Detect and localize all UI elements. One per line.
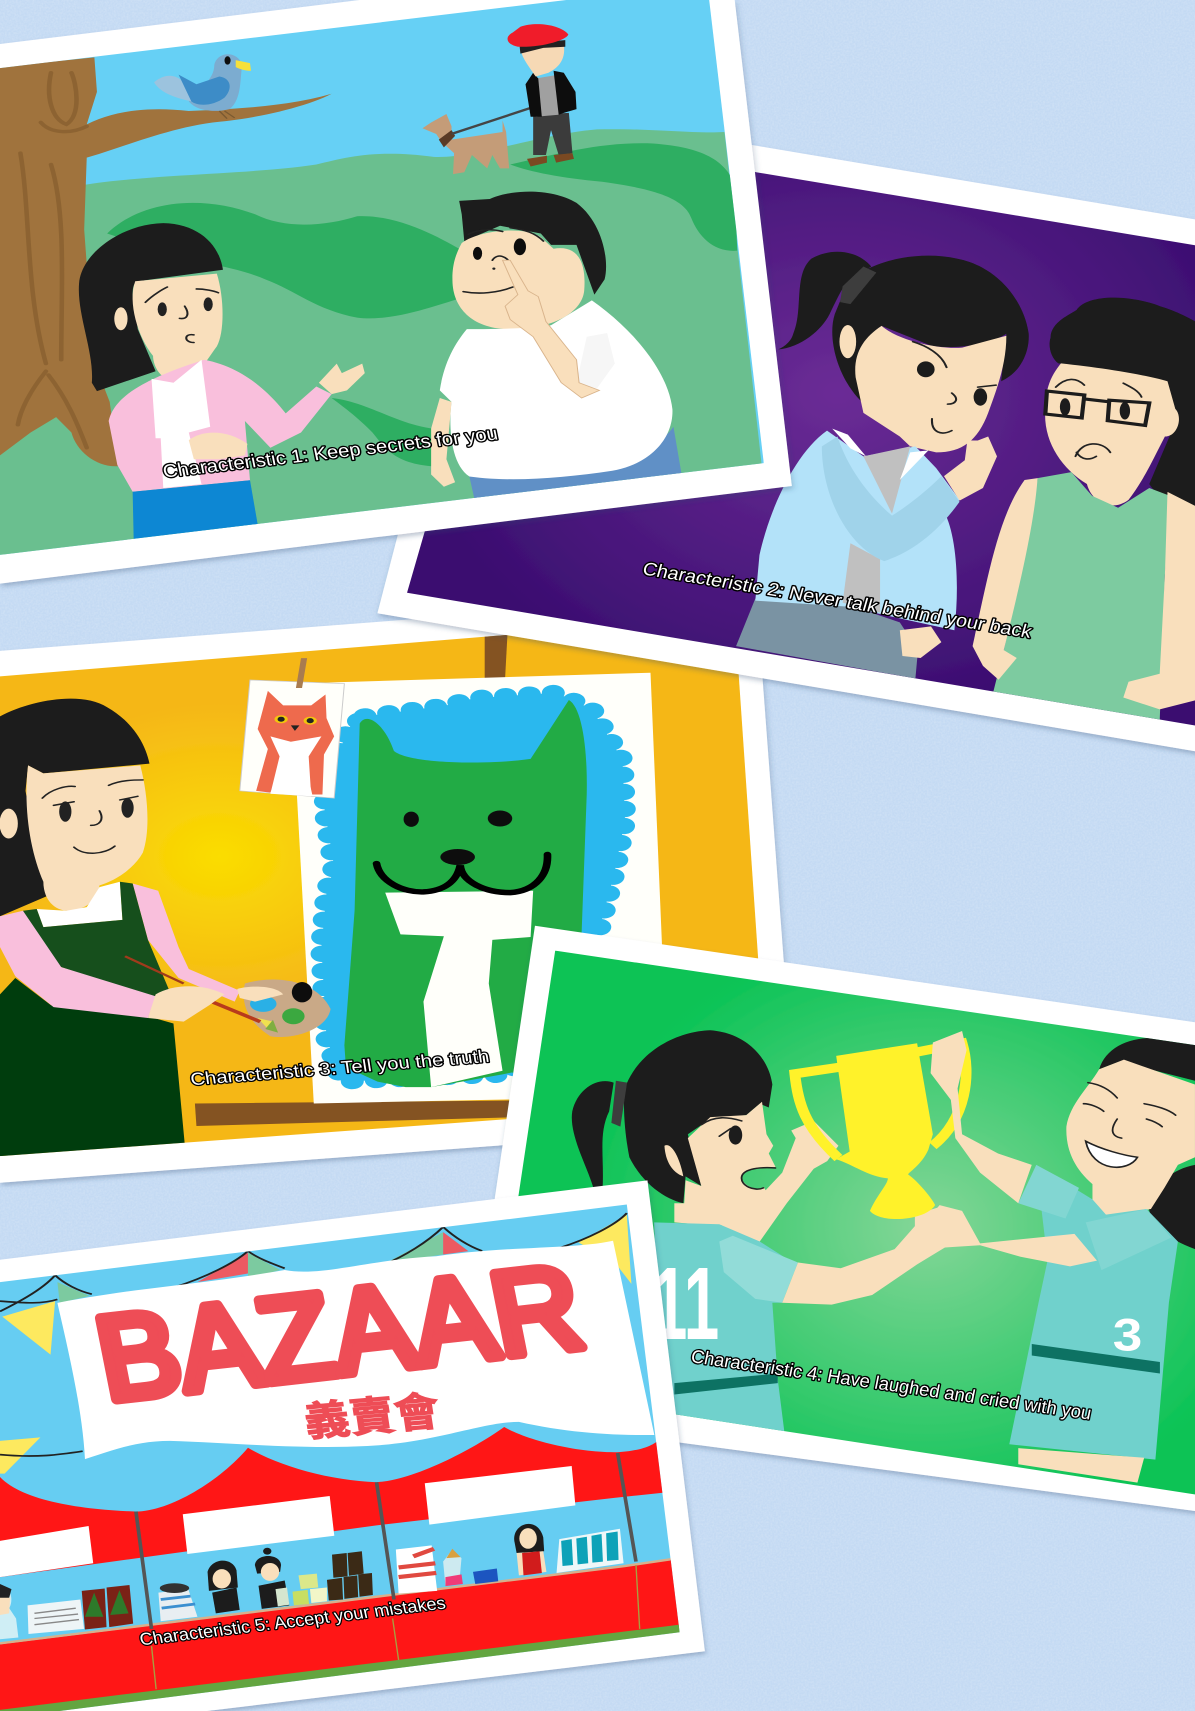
scene: bazaar stalls (0, 1198, 689, 1711)
figure: girl in pink cardigan (79, 223, 365, 539)
panel: characteristic 2, whispering (377, 104, 1195, 773)
panel: characteristic 4, trophy (493, 926, 1195, 1516)
figure: girl with glasses (973, 298, 1195, 721)
white banner (57, 1241, 654, 1459)
banner title Chinese: 義賣會 (301, 1389, 443, 1446)
figure: girl with number 1 jersey (572, 1030, 949, 1433)
caption 3: Characteristic 3: Tell you the truth (189, 1046, 491, 1089)
hills (0, 129, 765, 559)
caption 1: Characteristic 1: Keep secrets for you (161, 422, 500, 482)
figure: boy touching nose (431, 192, 682, 499)
bird (154, 54, 251, 119)
scene: two girls gossiping (407, 172, 1195, 726)
man with red cap (508, 24, 577, 166)
scene: park (0, 0, 796, 574)
figure: girl painting (0, 699, 331, 1158)
caption 5: Characteristic 5: Accept your mistakes (138, 1594, 447, 1650)
scene: winning a trophy (518, 950, 1195, 1494)
blank stall signs (0, 1466, 575, 1577)
dog on leash (422, 107, 530, 174)
trophy (795, 1043, 966, 1219)
bunting flags (0, 1213, 631, 1474)
photo frame (377, 104, 1195, 763)
figure: whispering girl (736, 252, 1029, 679)
jersey number 11: 11 (652, 1246, 719, 1361)
tent posts (136, 1453, 636, 1629)
photo frame (0, 593, 796, 1183)
canvas (291, 673, 668, 1103)
caption 2: Characteristic 2: Never talk behind your back (640, 558, 1034, 642)
blue paint background (321, 693, 625, 1082)
photo frame (463, 926, 1195, 1519)
photo frame (0, 1180, 705, 1711)
panel: characteristic 5, bazaar (0, 1180, 705, 1711)
painted green cat (344, 700, 587, 1087)
scene: art class (0, 635, 758, 1156)
panel: characteristic 3, painting (0, 593, 816, 1194)
tree (0, 57, 332, 466)
dark bushes (107, 143, 737, 467)
stall goods and sellers (0, 1524, 624, 1639)
banner title BAZAAR: BAZAAR (85, 1240, 593, 1426)
red tents (0, 1427, 664, 1577)
easel (195, 631, 515, 1126)
photo frame (0, 0, 792, 584)
red counters (0, 1560, 680, 1711)
panel: characteristic 1, keep secrets (0, 0, 796, 584)
caption 4: Characteristic 4: Have laughed and cried with you (689, 1347, 1093, 1424)
jersey number 3: 3 (1113, 1310, 1142, 1361)
figure: laughing girl with number 3 jersey (922, 1031, 1195, 1483)
reference cat picture (240, 658, 344, 798)
